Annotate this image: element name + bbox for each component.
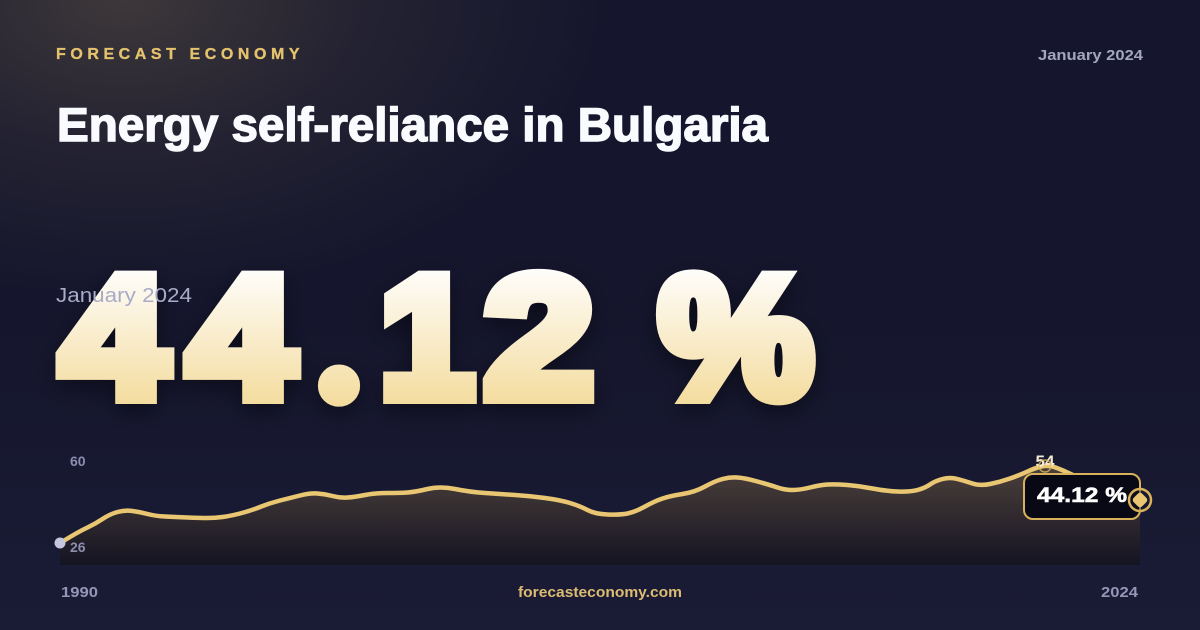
headline value bbox=[61, 172, 813, 460]
peak value label: 54 bbox=[1036, 452, 1055, 471]
headline value: 4 bbox=[61, 241, 167, 433]
line chart bbox=[54, 452, 1151, 565]
headline value: 2 bbox=[484, 242, 594, 434]
date top right: January 2024 bbox=[1038, 47, 1144, 64]
chart line bbox=[60, 466, 1140, 543]
chart area fill bbox=[60, 466, 1140, 565]
current value callout: 44.12 % bbox=[1037, 484, 1127, 507]
axis min label: 26 bbox=[70, 539, 86, 555]
start year label: 1990 bbox=[61, 584, 98, 601]
date under value: January 2024 bbox=[56, 285, 192, 307]
end marker bbox=[1129, 489, 1151, 511]
headline value: 1 bbox=[380, 241, 474, 434]
axis max label: 60 bbox=[70, 453, 86, 469]
brand label: FORECAST ECONOMY bbox=[56, 46, 300, 63]
start point bbox=[54, 538, 66, 548]
headline value: . bbox=[306, 172, 372, 460]
end year label: 2024 bbox=[1101, 584, 1139, 601]
current value callout bbox=[1024, 474, 1140, 519]
headline value: % bbox=[659, 241, 813, 433]
title: Energy self-reliance in Bulgaria bbox=[57, 98, 769, 151]
source url: forecasteconomy.com bbox=[518, 584, 682, 601]
peak marker bbox=[1039, 460, 1051, 472]
headline value: 4 bbox=[188, 241, 294, 433]
